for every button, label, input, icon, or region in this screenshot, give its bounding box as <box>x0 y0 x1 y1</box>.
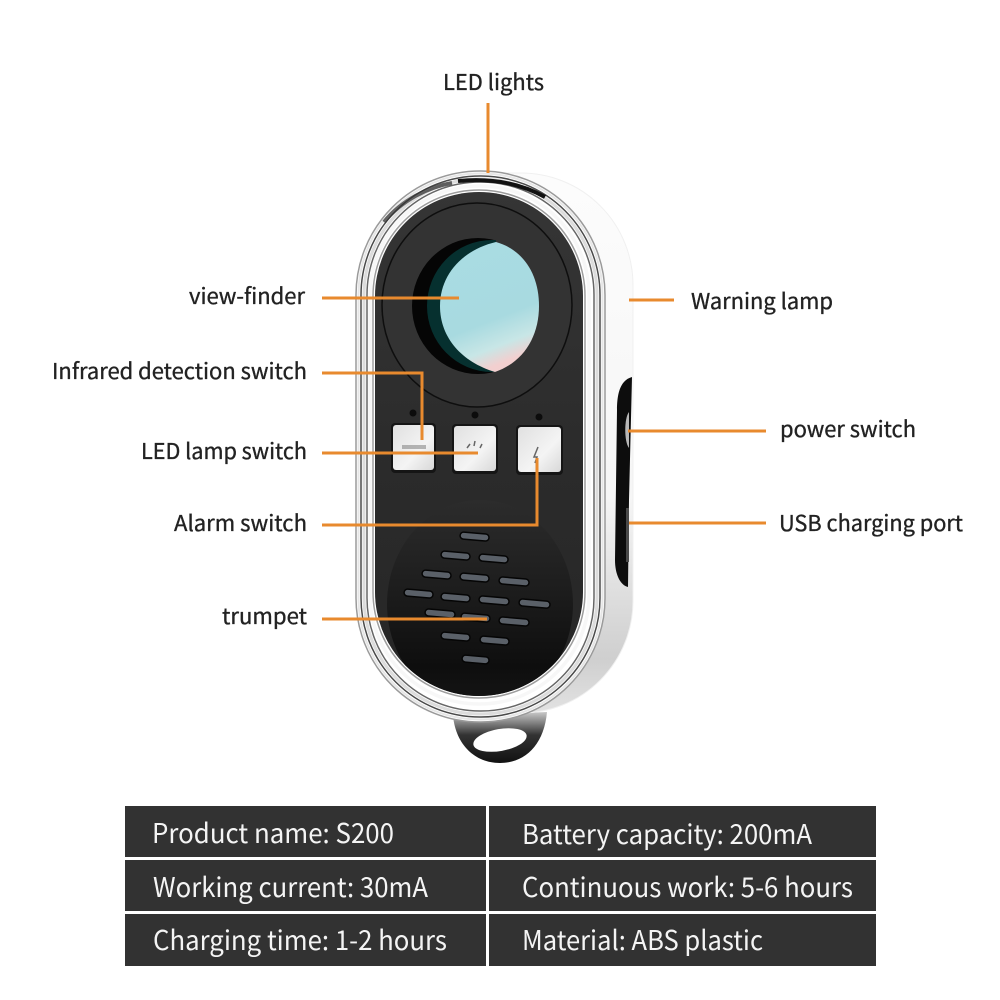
chrome frame <box>356 171 605 722</box>
label: power switch: power switch <box>780 412 916 444</box>
white side shell <box>385 173 633 713</box>
row 2 left: Working current: 30mA <box>153 866 429 905</box>
label: view-finder: view-finder <box>189 279 305 311</box>
row 1 right: Battery capacity: 200mA <box>522 813 813 852</box>
row 3 left: Charging time: 1-2 hours <box>153 919 447 958</box>
row 3 right <box>489 914 876 966</box>
row 2 left <box>125 860 486 911</box>
alarm button <box>516 425 563 475</box>
callout lines <box>322 103 766 619</box>
row 2 right <box>489 860 876 911</box>
label: LED lamp switch: LED lamp switch <box>141 434 307 466</box>
usb port <box>626 508 629 562</box>
row 3 right: Material: ABS plastic <box>522 919 763 958</box>
power switch knob <box>625 412 629 448</box>
label: Warning lamp: Warning lamp <box>691 284 833 316</box>
label: trumpet: trumpet <box>222 599 307 631</box>
led button <box>452 424 498 474</box>
row 3 left <box>125 914 486 966</box>
indicator dots <box>410 410 542 420</box>
row 1 left: Product name: S200 <box>152 812 394 851</box>
device illustration <box>356 171 633 763</box>
label: Infrared detection switch: Infrared detection switch <box>52 354 307 386</box>
row 1 right <box>489 806 876 857</box>
black face panel <box>375 192 583 696</box>
infrared button <box>391 423 436 473</box>
key ring <box>453 712 547 763</box>
label: Alarm switch: Alarm switch <box>174 506 307 538</box>
row 1 left <box>125 806 486 857</box>
view-finder lens <box>412 238 539 374</box>
row 2 right: Continuous work: 5-6 hours <box>522 866 853 905</box>
side slot <box>615 377 632 587</box>
label: LED lights: LED lights <box>443 65 544 97</box>
specification table <box>125 806 876 966</box>
speaker <box>387 531 573 696</box>
label: USB charging port: USB charging port <box>779 506 963 538</box>
camera ring <box>382 203 572 407</box>
